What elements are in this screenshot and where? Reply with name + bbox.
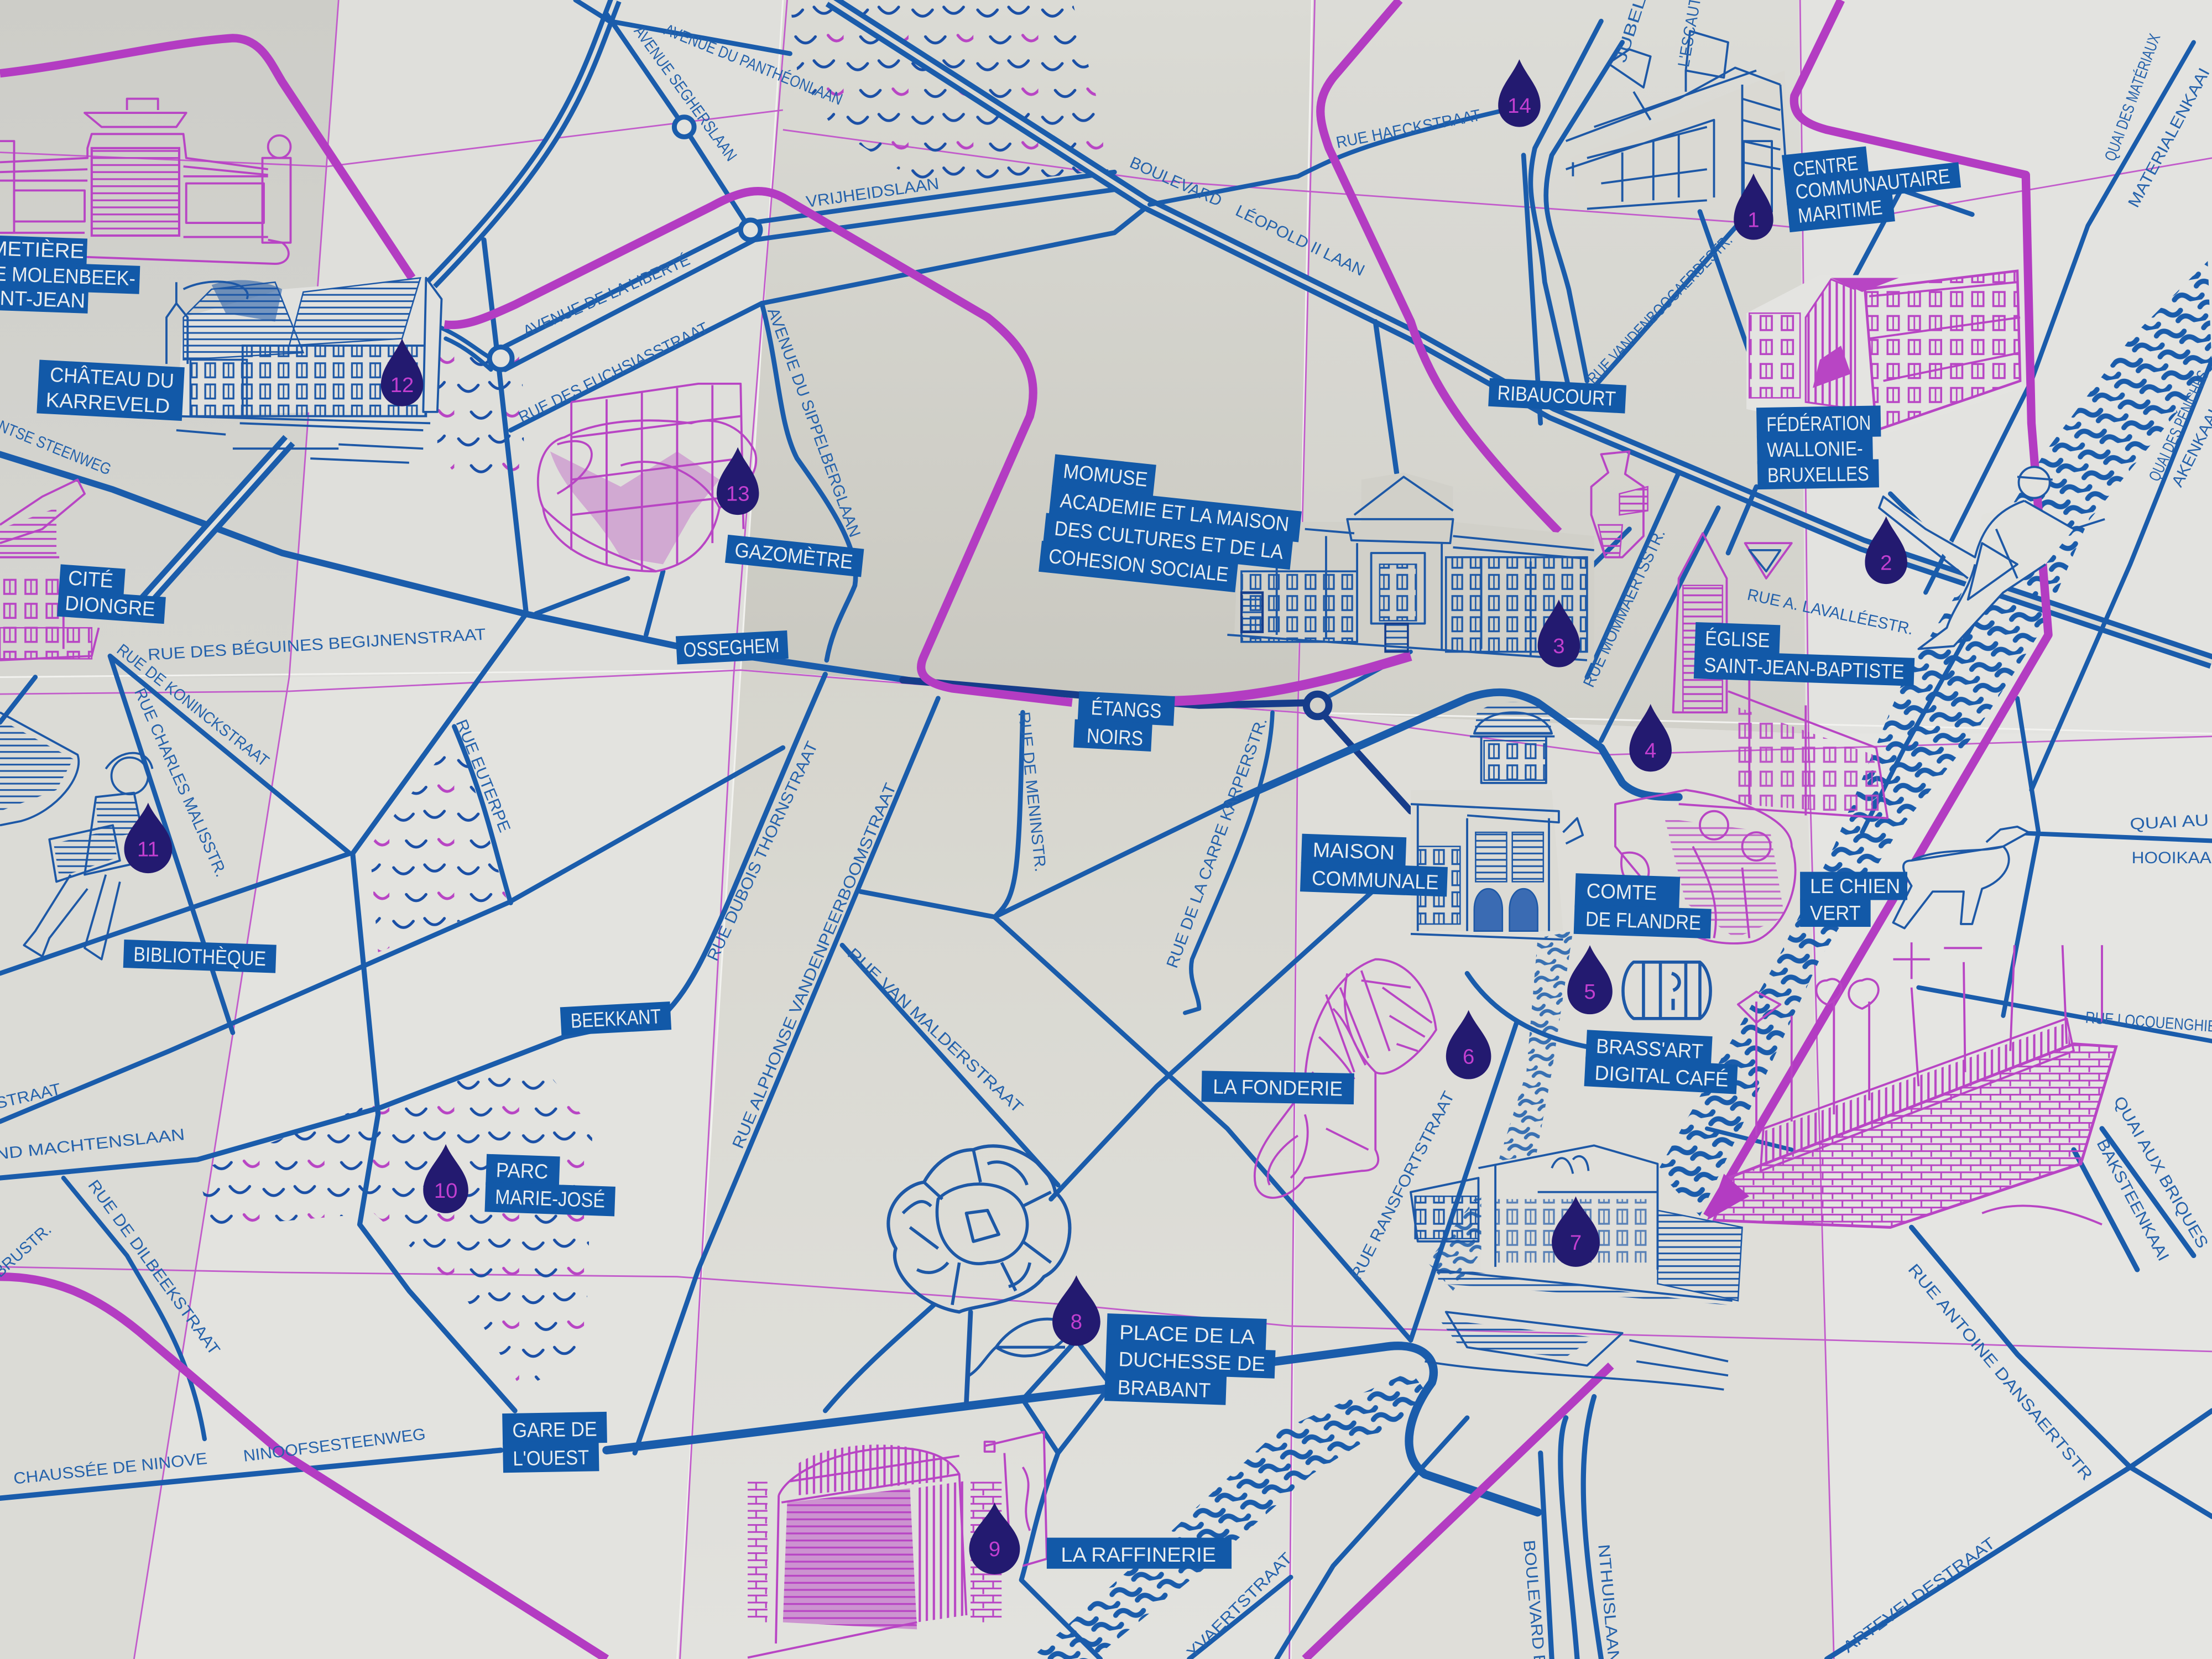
street names: RUE DE DILBEEKSTRAAT	[85, 1177, 223, 1359]
marker drop 13	[717, 447, 759, 515]
marker drop 2: 2	[1880, 551, 1892, 575]
street names: RUE A. LAVALLÉESTR.	[1746, 586, 1915, 639]
street names: QUAI AUX BRIQUES	[2110, 1093, 2212, 1251]
road rings	[489, 117, 1329, 717]
label: Maison communale: MAISON	[1312, 838, 1395, 864]
marker drop 10: 10	[434, 1179, 457, 1203]
illustration: running man	[1879, 467, 2105, 649]
label: Comte de Flandre: DE FLANDRE	[1585, 907, 1702, 934]
marker drop 4	[1629, 704, 1672, 771]
label: Ribaucourt: RIBAUCOURT	[1497, 382, 1616, 410]
label: Cimetière de Molenbeek-Saint-Jean	[0, 234, 141, 315]
marker drop 14: 14	[1507, 94, 1531, 118]
marker drop 7: 7	[1570, 1231, 1582, 1255]
label: Parc Marie-José	[484, 1154, 617, 1216]
illustration: Centre communautaire	[1566, 31, 1792, 212]
label: Étangs Noirs: ÉTANGS	[1091, 696, 1162, 723]
triangular magenta quay marker	[1707, 1173, 1749, 1220]
label: Château du Karreveld: CHÂTEAU DU	[49, 363, 175, 393]
marker drop 8: 8	[1071, 1310, 1082, 1334]
street names: NINOOFSESTEENWEG	[242, 1425, 426, 1465]
park texture: Marie-José	[197, 1058, 592, 1390]
marker drop 6	[1446, 1010, 1491, 1079]
marker drop 9: 9	[989, 1537, 1000, 1561]
street names: CHAUSSÉE DE NINOVE	[13, 1449, 208, 1488]
illustration: green dog	[1893, 827, 2028, 928]
marker drop 1: 1	[1747, 208, 1760, 232]
marker drop 10	[423, 1144, 468, 1213]
label: Place de la Duchesse de Brabant: DUCHESSE DE	[1118, 1348, 1265, 1375]
illustration: quay with flowers	[1714, 942, 2116, 1227]
label: Église Saint-Jean-Baptiste	[1694, 622, 1916, 686]
label: Comte de Flandre	[1574, 873, 1713, 938]
street names: RUE ALPHONSE VANDENPEERBOOMSTRAAT	[729, 780, 900, 1151]
illustration: Fédération building	[1746, 268, 2022, 437]
street names: RUE RANSFORTSTRAAT	[1347, 1088, 1458, 1283]
illustration: Château du Karreveld	[166, 278, 441, 463]
illustration: left ship	[0, 712, 79, 825]
park texture: Karreveld	[437, 353, 525, 487]
street names: BOULEVARD	[1127, 153, 1225, 210]
label: Comte de Flandre: COMTE	[1586, 879, 1657, 905]
marker drop 14	[1498, 59, 1541, 127]
street names: RUE VAN MALDERSTRAAT	[844, 945, 1026, 1117]
illustration: gasometer	[538, 384, 756, 571]
label: Momuse	[1039, 454, 1305, 598]
marker drop 5: 5	[1584, 980, 1596, 1004]
street names: AVENUE DU PANTHÉONLAAN	[661, 20, 845, 109]
street names: JUBEL	[1611, 0, 1650, 65]
illustration: Raffinerie gate	[748, 1432, 1047, 1657]
label: Fédération Wallonie-Bruxelles: WALLONIE-	[1767, 437, 1863, 461]
label: Place de la Duchesse de Brabant: BRABANT	[1117, 1376, 1211, 1402]
marker drop 12	[381, 338, 423, 406]
illustration: Maison communale	[1411, 702, 1583, 940]
marker drop 5	[1567, 945, 1613, 1014]
label: Fédération Wallonie-Bruxelles: BRUXELLES	[1767, 462, 1869, 487]
street names: AVENUE DU SIPPELBERGLAAN	[764, 305, 864, 540]
street names: RUE VANDENBOOGAERDESTR.	[1584, 231, 1736, 388]
label: Étangs Noirs: NOIRS	[1086, 724, 1144, 750]
label: La Fonderie: LA FONDERIE	[1213, 1075, 1343, 1100]
label: La Fonderie	[1201, 1071, 1354, 1104]
street names: RUE DE MENINSTR.	[1015, 711, 1050, 873]
label: Osseghem: OSSEGHEM	[683, 634, 780, 661]
label: Château du Karreveld: KARREVELD	[45, 388, 170, 418]
label: Place de la Duchesse de Brabant: PLACE DE LA	[1119, 1321, 1255, 1348]
marker drop 1	[1734, 174, 1773, 240]
label: Place de la Duchesse de Brabant	[1104, 1313, 1276, 1407]
illustration: Momuse building	[1227, 473, 1594, 663]
label: La Raffinerie	[1047, 1538, 1232, 1569]
label: Centre communautaire maritime: COMMUNAUTAIRE	[1794, 165, 1951, 204]
illustration: Église Saint-Jean-Baptiste	[1673, 533, 1887, 818]
marker drop 11: 11	[137, 837, 159, 861]
marker drop 2	[1865, 517, 1907, 584]
street names: AVENUE DE LA LIBERTÉ	[520, 251, 693, 341]
marker drop 8	[1052, 1275, 1100, 1346]
marker drop 9	[969, 1503, 1020, 1574]
marker drop 11	[124, 803, 172, 873]
street names: RUE EUTERPE	[452, 717, 514, 835]
label: Cité Diongre: CITÉ	[67, 566, 114, 592]
illustration: reader at library	[24, 753, 153, 959]
illustration: statue	[1592, 451, 1648, 557]
street names: RUE ANTOINE DANSAERTSTR	[1905, 1260, 2096, 1484]
park texture: top centre	[790, 0, 1114, 190]
marker drop 7	[1552, 1196, 1600, 1267]
label: Momuse: DES CULTURES ET DE LA	[1053, 517, 1285, 564]
label: Parc Marie-José: PARC	[495, 1159, 549, 1183]
street names: RUE MOMMAERTSSTR.	[1580, 526, 1669, 690]
label: Centre communautaire maritime	[1782, 137, 1964, 232]
label: Gare de l'Ouest: L'OUEST	[513, 1446, 589, 1470]
label: Cité Diongre: DIONGRE	[64, 592, 156, 620]
marker drop 4: 4	[1645, 739, 1656, 763]
street names: QUAI AU	[2130, 811, 2209, 833]
label: La Raffinerie: LA RAFFINERIE	[1061, 1543, 1216, 1566]
marker drop 13: 13	[726, 482, 749, 506]
label: Église Saint-Jean-Baptiste: ÉGLISE	[1704, 627, 1770, 652]
label: Centre communautaire maritime: CENTRE	[1792, 152, 1859, 181]
street names: HOOIKAAI	[2132, 849, 2212, 867]
illustration: cemetery gate	[0, 99, 291, 264]
marker drop 12: 12	[390, 373, 414, 397]
label: Gare de l'Ouest: GARE DE	[512, 1418, 597, 1442]
illustration: Café barrel	[1623, 962, 1710, 1019]
label: Étangs Noirs	[1073, 691, 1175, 753]
label: Maison communale	[1300, 834, 1449, 896]
marker drop 6: 6	[1463, 1045, 1474, 1068]
street names: VRIJHEIDSLAAN	[805, 175, 940, 211]
street names: LÉOPOLD II LAAN	[1233, 201, 1368, 280]
illustration: rose	[888, 1146, 1072, 1404]
marker drop 3: 3	[1553, 634, 1565, 658]
illustration: lion	[1255, 959, 1436, 1198]
canal: lower waves	[1030, 1371, 1432, 1659]
label: Gazomètre: GAZOMÈTRE	[734, 539, 854, 573]
label: Le Chien Vert	[1800, 872, 1907, 927]
street names: BOULEVARD B	[1520, 1539, 1549, 1659]
label: Le Chien Vert: LE CHIEN	[1810, 875, 1900, 898]
label: Parc Marie-José: MARIE-JOSÉ	[495, 1186, 606, 1212]
label: Église Saint-Jean-Baptiste: SAINT-JEAN-BAPTISTE	[1704, 654, 1905, 683]
label: Fédération Wallonie-Bruxelles	[1756, 405, 1882, 489]
label: Beekkant: BEEKKANT	[570, 1005, 661, 1032]
street names: RUE DE LA CARPE KARPERSTR.	[1163, 715, 1271, 971]
label: Cité Diongre	[57, 564, 168, 624]
label: Brass'Art Digital Café: BRASS'ART	[1595, 1035, 1704, 1063]
street names: MATERIALENKAAI	[2125, 65, 2212, 211]
marker drop 3	[1538, 599, 1580, 667]
street names: RUE DES BÉGUINES BEGIJNENSTRAAT	[147, 625, 486, 664]
label: Château du Karreveld	[36, 360, 185, 421]
label: Brass'Art Digital Café	[1584, 1030, 1739, 1094]
label: Momuse: ACADEMIE ET LA MAISON	[1059, 489, 1290, 536]
street names: ARTEVELDESTRAAT	[1840, 1534, 1999, 1656]
label: Bibliothèque: BIBLIOTHÈQUE	[133, 943, 267, 970]
park texture: Euterpe	[369, 734, 508, 952]
canal: middle narrow waves	[1428, 931, 1573, 1291]
illustration: Cité Diongre building	[0, 479, 99, 660]
street names: YVAERTSTRAAT	[1183, 1549, 1296, 1659]
label: Brass'Art Digital Café: DIGITAL CAFÉ	[1594, 1061, 1729, 1091]
illustration: market scene	[1615, 790, 1796, 943]
street names: NTHUISLAAN	[1594, 1543, 1623, 1659]
label: Fédération Wallonie-Bruxelles: FÉDÉRATION	[1766, 411, 1871, 436]
label: Gare de l'Ouest	[502, 1412, 608, 1473]
street names: RUE HAECKSTRAAT	[1334, 106, 1482, 152]
street names: RUE DES FUCHSIASSTRAAT	[515, 319, 711, 427]
canal: main diagonal waves	[1657, 261, 2212, 1216]
street names: RUE DUBOIS THORNSTRAAT	[703, 739, 822, 964]
label: Centre communautaire maritime: MARITIME	[1797, 196, 1884, 227]
label: Maison communale: COMMUNALE	[1312, 867, 1439, 894]
label: Momuse: MOMUSE	[1062, 460, 1149, 491]
street names: RUE DE KONINCKSTRAAT	[113, 640, 273, 770]
street names: AVENUE SEGHERSLAAN	[630, 23, 740, 165]
illustration: boat and Art Nouveau building	[1411, 1145, 1743, 1390]
label: Momuse: COHESION SOCIALE	[1047, 545, 1229, 586]
label: Le Chien Vert: VERT	[1810, 901, 1861, 924]
street names: BAKSTEENKAAI	[2093, 1136, 2173, 1264]
street names: RUE CHARLES MALISSTR.	[131, 685, 231, 880]
